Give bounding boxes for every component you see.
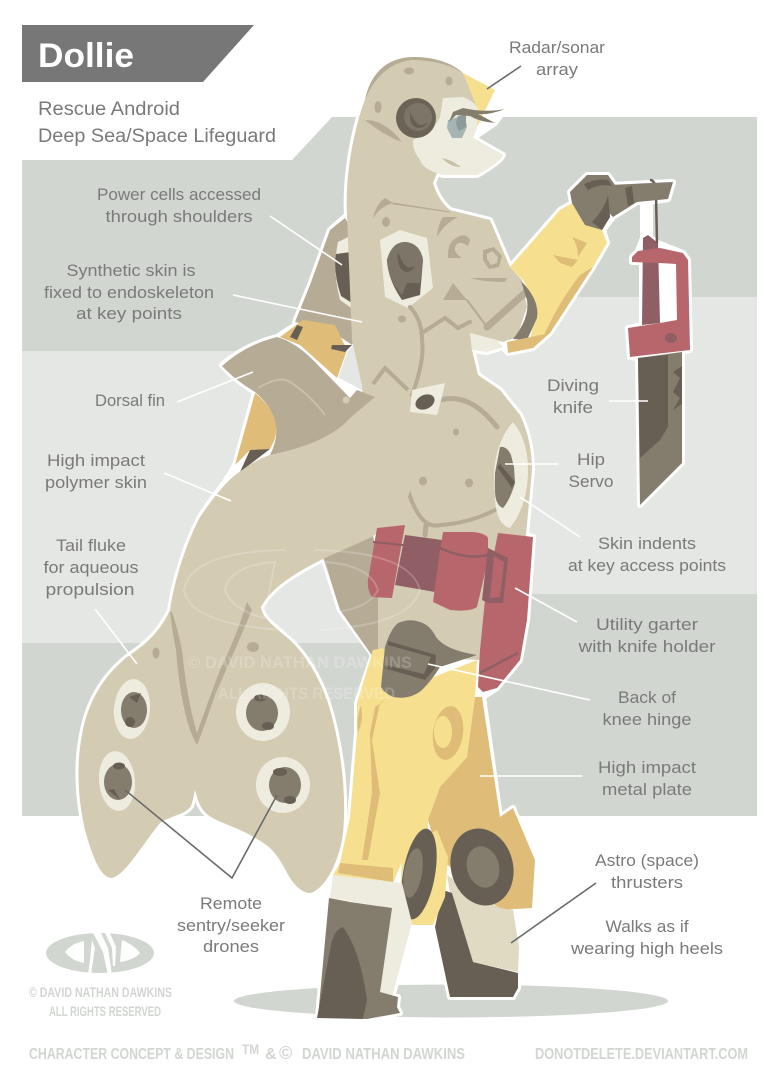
back of knee hinge <box>381 620 477 698</box>
label: skin indents: Skin indents <box>598 534 696 553</box>
label: knee hinge <box>428 664 692 729</box>
label: radar/sonar array <box>487 38 605 89</box>
copyright block: ALL RIGHTS RESERVED <box>49 1003 161 1019</box>
label: polymer skin: polymer skin <box>45 473 147 492</box>
knife cord <box>650 180 657 243</box>
footer credit: © <box>279 1043 292 1063</box>
left boot <box>317 875 412 1019</box>
thrusters <box>395 821 522 925</box>
drones <box>96 678 310 813</box>
knife <box>628 235 690 505</box>
label: utility garter <box>515 588 716 656</box>
label: synthetic skin: Synthetic skin is <box>66 261 196 280</box>
label: radar/sonar array: array <box>536 60 579 79</box>
watermark <box>184 550 420 703</box>
thigh plate <box>333 648 477 883</box>
label: diving knife: Diving <box>547 376 599 395</box>
label: metal plate: metal plate <box>602 780 692 799</box>
ground shadow <box>234 984 668 1018</box>
label: hip servo: Hip <box>577 450 605 469</box>
radar sonar array <box>463 73 495 127</box>
character: Dollie <box>78 57 690 1019</box>
chest tag <box>410 383 445 415</box>
label: thrusters and heels: Walks as if <box>606 917 689 936</box>
label: drones: Remote <box>200 894 262 913</box>
subtitle: Rescue Android <box>38 99 180 120</box>
label: dorsal fin: Dorsal fin <box>95 391 165 410</box>
background bands <box>22 117 757 816</box>
torso shading lines <box>373 198 507 300</box>
title banner <box>22 25 254 82</box>
label: power cells: through shoulders <box>106 207 252 226</box>
label: polymer skin: High impact <box>47 451 145 470</box>
label: metal plate <box>480 758 696 799</box>
footer credit: & <box>265 1046 277 1063</box>
label: utility garter: with knife holder <box>577 637 716 656</box>
hand and grip <box>570 175 673 230</box>
label: thrusters and heels: wearing high heels <box>570 939 723 958</box>
gap between far arm and body <box>337 330 365 395</box>
subtitle: Deep Sea/Space Lifeguard <box>38 126 276 147</box>
footer credit: TM <box>242 1041 259 1057</box>
footer credit <box>29 1041 748 1063</box>
label: hip servo: Servo <box>568 472 614 491</box>
label: power cells: Power cells accessed <box>97 185 261 204</box>
label: dorsal fin <box>95 372 253 410</box>
title banner: Dollie <box>38 37 134 75</box>
label: diving knife: knife <box>553 398 593 417</box>
icon: logo <box>46 931 154 975</box>
label: tail fluke: for aqueous <box>44 558 138 577</box>
label: drones: drones <box>203 937 259 956</box>
dorsal fin <box>222 337 408 455</box>
label: drones <box>125 790 285 956</box>
shoulder access panel <box>380 230 433 308</box>
label: thrusters and heels <box>511 851 723 958</box>
subtitle <box>38 99 276 147</box>
label: diving knife <box>547 376 648 417</box>
label: synthetic skin: fixed to endoskeleton <box>44 283 214 302</box>
label: knee hinge: Back of <box>618 688 676 707</box>
tail <box>78 392 415 893</box>
hip servo <box>494 422 528 528</box>
label: tail fluke: propulsion <box>46 580 134 599</box>
watermark: © DAVID NATHAN DAWKINS <box>188 653 412 672</box>
label: radar/sonar array: Radar/sonar <box>509 38 605 57</box>
far leg <box>323 530 385 657</box>
near calf and shoe <box>435 875 519 997</box>
label: thrusters and heels: Astro (space) <box>595 851 699 870</box>
copyright block <box>29 984 172 1019</box>
label: synthetic skin <box>44 261 362 323</box>
label: synthetic skin: at key points <box>76 304 182 323</box>
utility garter <box>368 525 533 692</box>
label: power cells <box>97 185 342 265</box>
near arm <box>507 203 607 353</box>
label: metal plate: High impact <box>598 758 696 777</box>
label: thrusters and heels: thrusters <box>611 873 683 892</box>
label: tail fluke: Tail fluke <box>56 536 126 555</box>
copyright block: © DAVID NATHAN DAWKINS <box>29 984 172 1000</box>
face <box>365 57 505 175</box>
lower leg plate <box>428 697 535 910</box>
far arm <box>235 218 362 472</box>
label: knee hinge: knee hinge <box>602 710 692 729</box>
label: hip servo <box>505 450 614 491</box>
label: utility garter: Utility garter <box>596 615 698 634</box>
white outline <box>78 57 690 1019</box>
watermark: ALL RIGHTS RESERVED <box>218 684 395 703</box>
label: drones: sentry/seeker <box>177 916 285 935</box>
footer credit: DAVID NATHAN DAWKINS <box>302 1046 465 1063</box>
underarm panel <box>470 333 503 352</box>
label: skin indents: at key access points <box>568 556 726 575</box>
footer credit: CHARACTER CONCEPT & DESIGN <box>29 1046 234 1063</box>
label: polymer skin <box>45 451 231 501</box>
label: tail fluke <box>44 536 138 664</box>
torso, neck and head <box>347 57 532 660</box>
label: skin indents <box>520 497 726 575</box>
